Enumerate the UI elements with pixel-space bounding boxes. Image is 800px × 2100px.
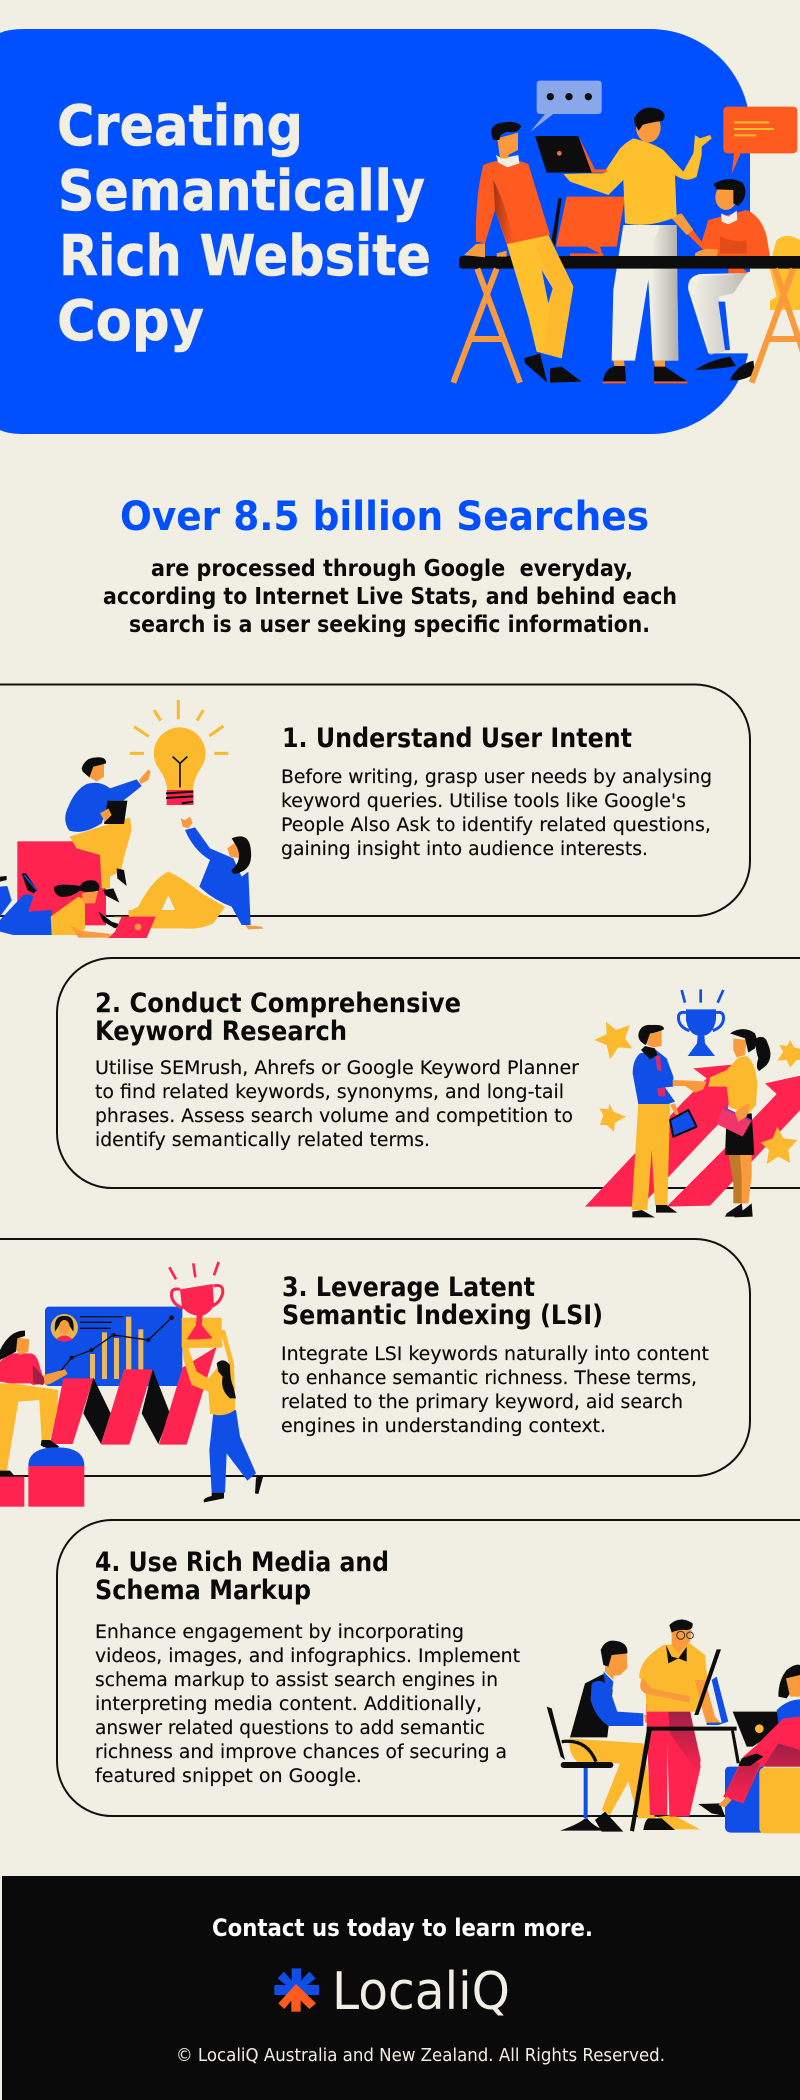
step 2 text: Utilise SEMrush, Ahrefs or Google Keyword Planner	[95, 1058, 579, 1079]
step 4 text: Enhance engagement by incorporating	[95, 1622, 464, 1643]
zig-zag steps	[50, 1347, 217, 1445]
panel: hero banner	[0, 29, 800, 434]
sitting man	[65, 757, 151, 903]
table top	[459, 256, 800, 269]
step 3 text: Integrate LSI keywords naturally into content	[281, 1344, 709, 1365]
monitor	[552, 197, 625, 256]
panel: footer	[2, 1876, 800, 2100]
chair	[753, 236, 800, 310]
desk and monitor	[630, 1649, 740, 1832]
step 4 text: featured snippet on Google.	[95, 1766, 362, 1787]
man	[632, 1025, 707, 1217]
copyright: © LocaliQ Australia and New Zealand. All Rights Reserved.	[176, 2045, 665, 2066]
step 3 text: to enhance semantic richness. These terms,	[281, 1368, 697, 1389]
step 4 text: answer related questions to add semantic	[95, 1718, 485, 1739]
logo mark	[274, 1968, 319, 2012]
dashboard board	[45, 1307, 182, 1386]
step 4 text	[95, 1622, 520, 1787]
woman carrying trophy	[182, 1330, 263, 1502]
title: Copy	[57, 289, 204, 354]
title	[57, 94, 431, 354]
step 1 text: People Also Ask to identify related questions,	[281, 815, 711, 836]
step 3 heading: 3. Leverage Latent	[282, 1272, 535, 1303]
step 2 text	[95, 1058, 579, 1151]
trophy held high	[169, 1262, 223, 1348]
title: Creating	[57, 94, 303, 159]
card outline	[57, 1520, 800, 1816]
step 1 text: gaining insight into audience interests.	[281, 839, 648, 860]
panel: step 4	[57, 1520, 800, 1833]
climbing woman	[0, 1331, 68, 1477]
step 4 text: schema markup to assist search engines in	[95, 1670, 498, 1691]
illustration: chart climb and trophy	[0, 1262, 263, 1507]
stars	[594, 1022, 800, 1164]
card outline	[0, 1239, 750, 1476]
seated man with chair	[547, 1641, 666, 1832]
title: Rich Website	[59, 224, 431, 289]
speech bubble: dots	[530, 81, 602, 132]
step 4 text: richness and improve chances of securing a	[95, 1742, 507, 1763]
step 2 text: to find related keywords, synonyms, and long-tail	[95, 1082, 564, 1103]
panel: step 1	[0, 684, 750, 938]
standing person	[563, 108, 712, 383]
step 1 text: keyword queries. Utilise tools like Google's	[281, 791, 686, 812]
text block: intro: are processed through Google everyday,	[151, 556, 633, 582]
woman	[708, 1029, 770, 1217]
step 3 heading	[282, 1272, 603, 1331]
step 1 text: Before writing, grasp user needs by analysing	[281, 767, 712, 788]
illustration: team at desk	[547, 1620, 800, 1833]
woman on cushion with laptop	[698, 1665, 800, 1816]
standing man with glasses	[639, 1620, 722, 1830]
red block	[17, 841, 106, 925]
footer background	[2, 1876, 800, 2100]
card outline	[0, 684, 750, 916]
logo wordmark: LocaliQ	[332, 1962, 510, 2022]
step 2 text: phrases. Assess search volume and competition to	[95, 1106, 573, 1127]
call to action: Contact us today to learn more.	[212, 1914, 593, 1942]
logo	[274, 1962, 510, 2022]
step 2 heading	[95, 988, 461, 1047]
step 1 heading: 1. Understand User Intent	[282, 723, 632, 754]
lying woman with laptop	[0, 873, 156, 938]
step 4 heading: 4. Use Rich Media and	[95, 1547, 389, 1578]
speech bubble: lines	[723, 107, 797, 174]
text block: intro: search is a user seeking specific information.	[129, 612, 650, 638]
podium	[0, 1447, 84, 1507]
blue and yellow cushions	[725, 1767, 800, 1833]
text block: intro	[103, 556, 677, 638]
illustration: team at a standing table	[453, 81, 800, 383]
step 4 text: videos, images, and infographics. Implement	[95, 1646, 520, 1667]
illustration: lightbulb idea team	[0, 700, 263, 938]
trophy	[678, 989, 724, 1056]
step 3 text	[281, 1344, 709, 1437]
step 3 text: related to the primary keyword, aid search	[281, 1392, 683, 1413]
title: Semantically	[58, 159, 425, 224]
step 4 heading: Schema Markup	[95, 1575, 311, 1606]
step 4 heading	[95, 1547, 389, 1606]
table legs	[453, 269, 800, 383]
step 3 heading: Semantic Indexing (LSI)	[282, 1300, 603, 1331]
step 2 heading: Keyword Research	[95, 1016, 347, 1047]
hero blue shape	[0, 29, 750, 434]
illustration: handshake with trophy and arrows	[585, 989, 800, 1217]
growth arrows	[585, 1064, 800, 1207]
text block: intro: according to Internet Live Stats, and behind each	[103, 584, 677, 610]
laptop	[535, 136, 607, 173]
step 3 text: engines in understanding context.	[281, 1416, 606, 1437]
step 1 text	[281, 767, 712, 860]
step 2 text: identify semantically related terms.	[95, 1130, 430, 1151]
leaning person	[464, 122, 582, 383]
step 4 text: interpreting media content. Additionally,	[95, 1694, 482, 1715]
reclining woman	[128, 817, 263, 929]
heading: statistic: Over 8.5 billion Searches	[120, 494, 649, 540]
panel: step 2	[57, 958, 800, 1217]
panel: step 3	[0, 1239, 750, 1507]
seated person	[670, 179, 777, 380]
card outline	[57, 958, 800, 1188]
lightbulb	[130, 700, 228, 805]
step 2 heading: 2. Conduct Comprehensive	[95, 988, 461, 1019]
